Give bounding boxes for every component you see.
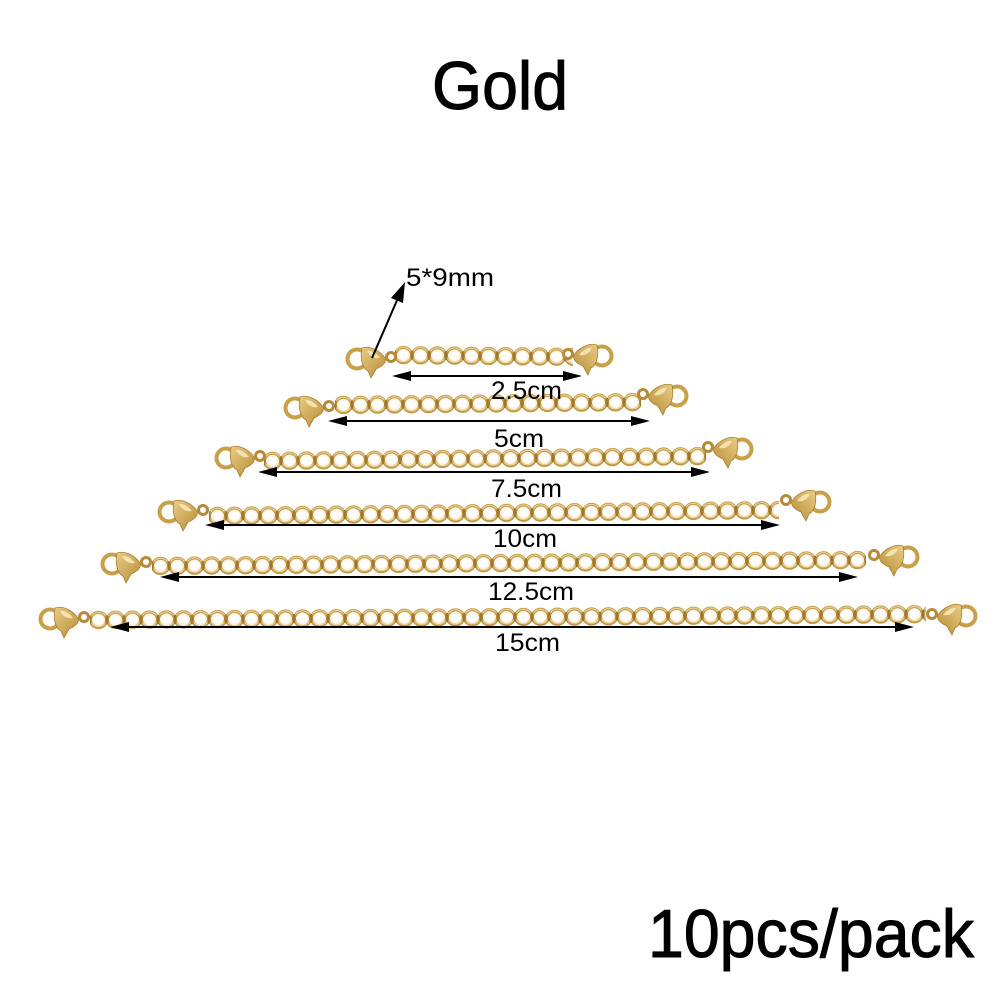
chain 12.5cm bbox=[102, 545, 918, 583]
length label 15cm: 15cm bbox=[495, 629, 560, 657]
arrow: 5cm bbox=[328, 416, 650, 426]
arrow: 10cm bbox=[205, 520, 780, 530]
chain 5cm bbox=[286, 384, 686, 427]
arrow: 12.5cm bbox=[160, 572, 858, 582]
length label 2.5cm: 2.5cm bbox=[491, 377, 562, 405]
length label 5cm: 5cm bbox=[494, 425, 544, 453]
arrow: 5*9mm clasp size bbox=[372, 282, 405, 358]
arrow: 15cm bbox=[110, 622, 914, 632]
arrow: 2.5cm bbox=[392, 371, 582, 381]
chain 10cm bbox=[160, 490, 830, 531]
chain 2.5cm bbox=[348, 344, 612, 378]
arrow: 7.5cm bbox=[258, 467, 710, 477]
clasp size label: 5*9mm bbox=[406, 264, 494, 292]
chain 7.5cm bbox=[216, 437, 752, 477]
length label 10cm: 10cm bbox=[493, 525, 557, 553]
chain 15cm bbox=[40, 604, 976, 638]
length label 12.5cm: 12.5cm bbox=[488, 578, 574, 606]
pack quantity label: 10pcs/pack bbox=[648, 896, 975, 972]
title: Gold bbox=[432, 48, 568, 124]
length label 7.5cm: 7.5cm bbox=[491, 475, 562, 503]
